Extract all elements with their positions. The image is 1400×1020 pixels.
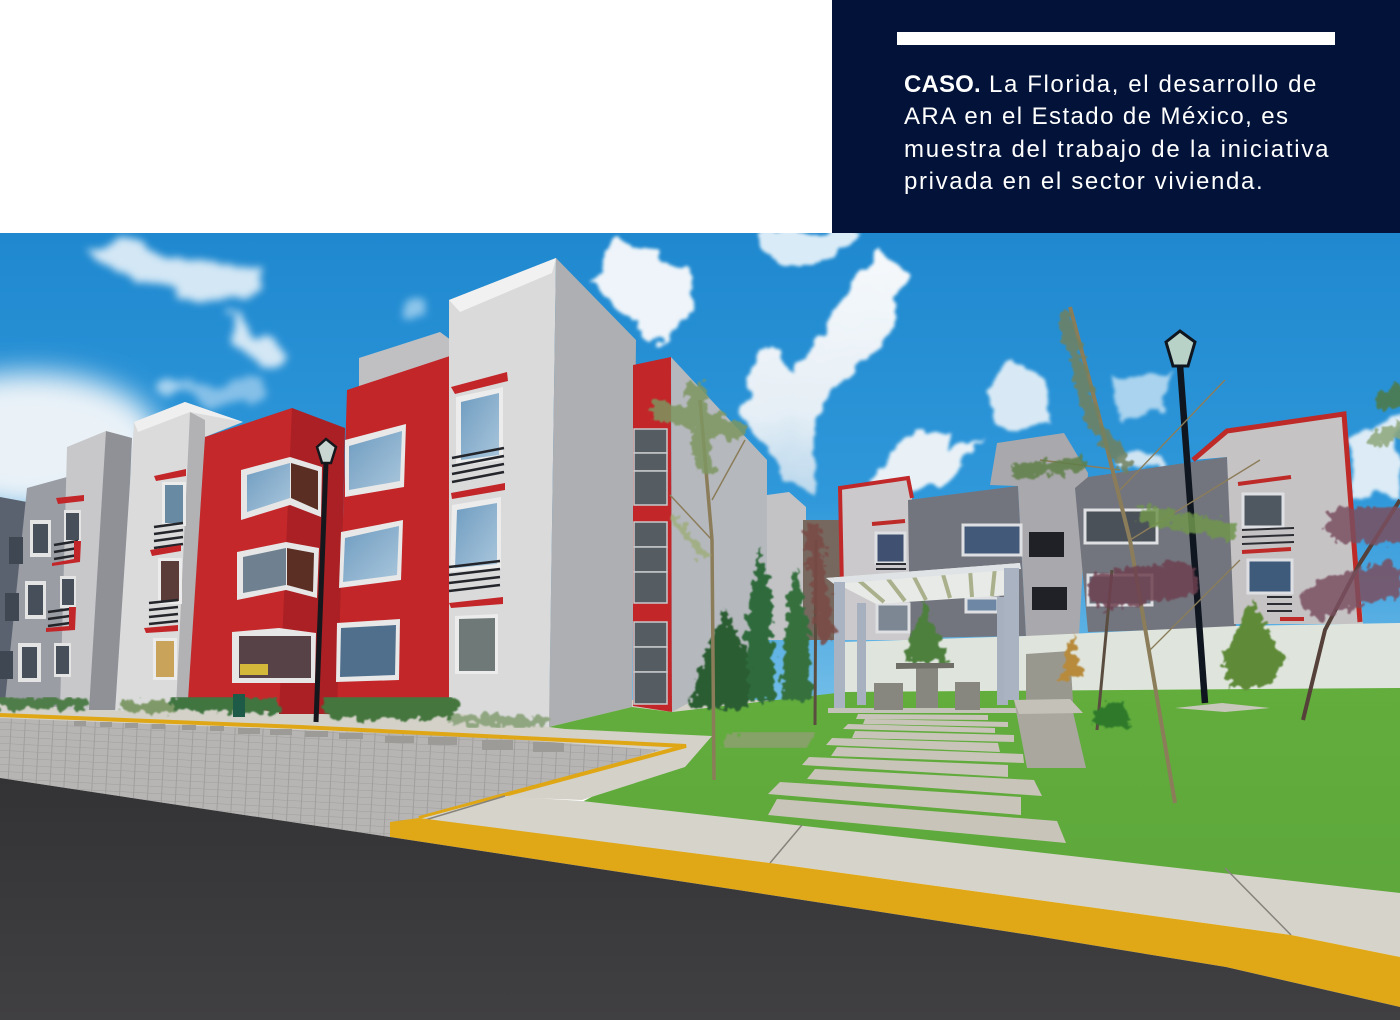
caption text: privada en el sector vivienda. <box>904 168 1264 195</box>
gray block <box>908 486 1026 638</box>
caption text: ARA en el Estado de México, es <box>904 103 1289 130</box>
main building <box>0 258 767 727</box>
small tree under pergola <box>902 600 948 662</box>
tall column windows <box>450 387 503 674</box>
second column <box>115 402 243 712</box>
parking pavers <box>0 718 686 837</box>
gray wing <box>5 477 89 710</box>
windows, back buildings <box>876 494 1292 632</box>
red wall <box>337 353 459 712</box>
far left block <box>0 497 27 700</box>
asphalt road <box>0 778 1400 1020</box>
side wall <box>671 357 767 712</box>
perimeter wall <box>843 623 1400 692</box>
street lamps <box>316 331 1270 722</box>
concrete bench <box>1014 699 1086 768</box>
caption text <box>904 71 1330 195</box>
pergola roof <box>826 563 1020 604</box>
ground base <box>0 700 1400 780</box>
table and stools <box>874 668 980 710</box>
sky <box>0 233 1400 713</box>
shrubs along the building <box>2 694 542 722</box>
bay window 3 <box>232 628 316 683</box>
balconies and red sills <box>46 372 508 633</box>
tall shaded face <box>549 258 636 727</box>
windows, main building <box>0 387 667 704</box>
yellow parking curb <box>0 715 686 818</box>
tall lit face <box>449 258 556 727</box>
lawn <box>549 688 1400 895</box>
caption text: CASO. La Florida, el desarrollo de <box>904 71 1318 98</box>
bay window 1 <box>241 457 322 520</box>
clouds <box>0 233 1400 510</box>
yellow road curb <box>390 818 1400 1007</box>
caption text: muestra del trabajo de la iniciativa <box>904 136 1330 163</box>
red trimmed block <box>838 477 912 640</box>
middle block <box>990 433 1088 636</box>
concrete block <box>1026 651 1073 702</box>
bollards <box>74 721 564 752</box>
stepping stones path <box>768 714 1066 843</box>
sidewalk joints <box>425 796 1291 935</box>
far tower <box>767 492 806 640</box>
young trees: trunks <box>670 307 1400 803</box>
pine trees <box>690 545 812 708</box>
second column windows <box>153 482 186 680</box>
sidewalk <box>419 796 1400 957</box>
photo: La Florida housing development <box>0 233 1400 1020</box>
walkway beside parking <box>0 708 712 800</box>
upper light block <box>359 332 459 388</box>
red bay <box>188 408 292 714</box>
left column <box>60 431 106 710</box>
buildings at the back right <box>767 412 1363 640</box>
red wall windows <box>336 424 406 682</box>
bay window 2 <box>237 542 319 600</box>
left wing windows <box>18 510 81 682</box>
pergola with seating <box>826 563 1086 768</box>
strip windows <box>634 429 667 704</box>
top ledge <box>449 258 556 312</box>
ornamental grass clump <box>735 735 800 745</box>
panel: caption <box>832 0 1400 233</box>
white rule <box>897 32 1335 45</box>
tree foliage <box>660 320 1400 635</box>
garden bushes <box>1060 600 1285 728</box>
right tall block <box>1193 412 1363 624</box>
right gray block <box>1075 457 1236 632</box>
red strip <box>633 357 672 712</box>
